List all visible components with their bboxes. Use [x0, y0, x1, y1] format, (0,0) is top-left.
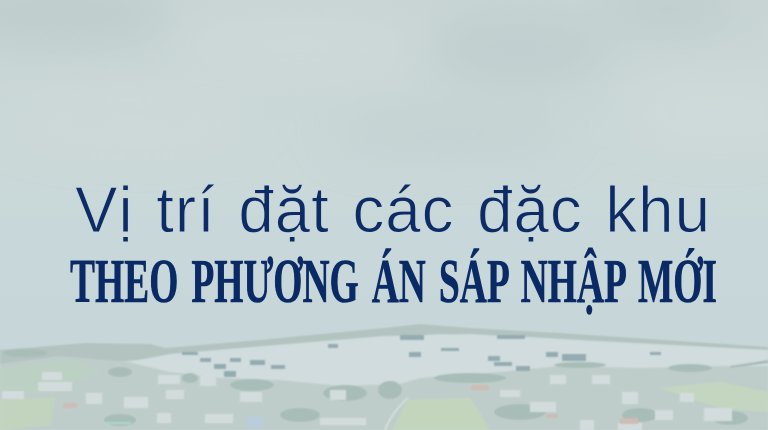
photo: island harbour and town [0, 324, 768, 430]
title line 1: Vị trí đặt các đặc khu [75, 173, 711, 246]
